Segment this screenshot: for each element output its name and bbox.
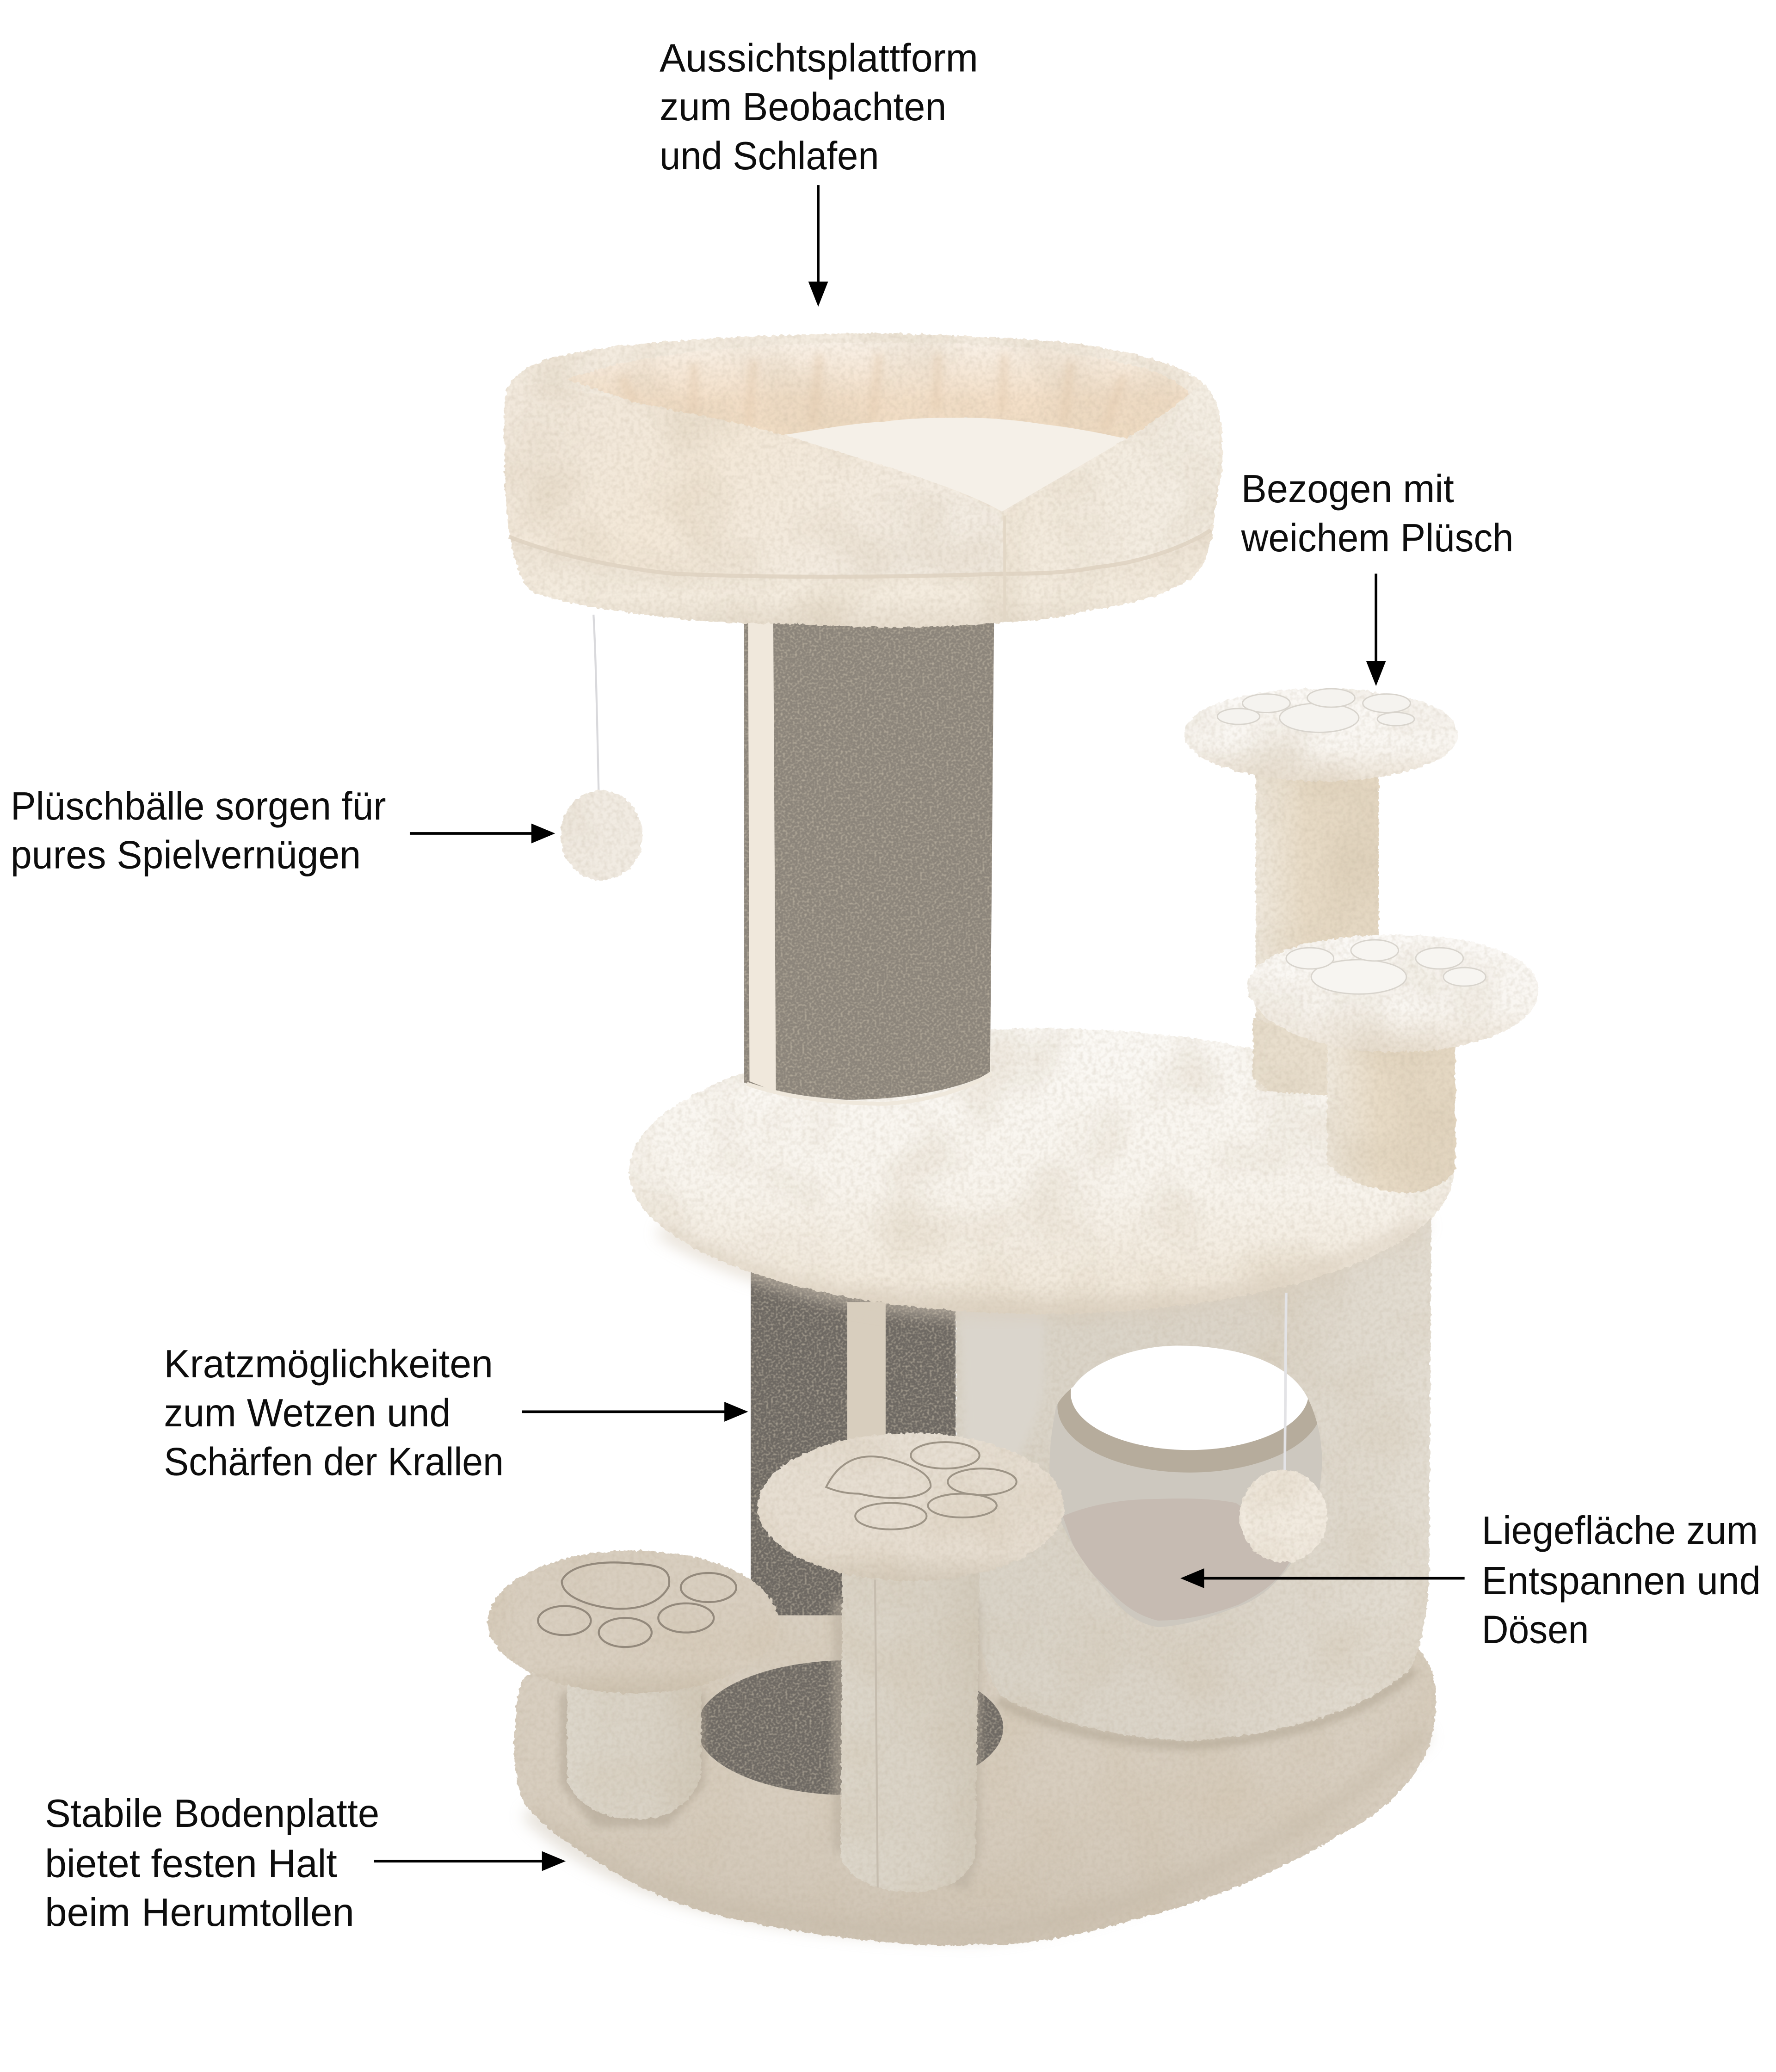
label: Liegefläche: Entspannen und (1482, 1559, 1761, 1603)
lower ball string (1285, 1293, 1286, 1470)
middle paw perch (758, 1433, 1064, 1581)
arrow: to base plate (374, 1851, 566, 1871)
scratching mat (697, 1660, 1003, 1795)
post seam (875, 1579, 878, 1887)
front-left wall (505, 384, 1005, 576)
base shading (529, 1732, 1425, 1932)
label: Aussichtsplattform: und Schlafen (660, 134, 879, 178)
cylinder lighter inner area (958, 1302, 1044, 1487)
label: Plüschbälle: pures Spielvernügen (11, 833, 361, 877)
top right plush perch (1184, 689, 1458, 781)
front right post (1327, 1038, 1455, 1193)
label: Kratzmöglichkeiten: Schärfen der Krallen (164, 1440, 504, 1484)
top bed (505, 333, 1223, 627)
paw print outlines (826, 1442, 1017, 1529)
upper plush ball (561, 790, 642, 880)
label: Stabile Bodenplatte: bietet festen Halt (45, 1841, 337, 1886)
column foot trim (747, 1073, 991, 1104)
bed lower band (509, 516, 1214, 627)
middle post (841, 1566, 980, 1892)
paw print pads (1286, 940, 1486, 994)
inner wall pleats (621, 354, 1123, 430)
band crease (509, 530, 1211, 577)
left post (567, 1676, 702, 1819)
house cylinder (956, 1196, 1431, 1741)
upper ball string (593, 615, 599, 797)
paw print outlines (538, 1562, 736, 1647)
label: Bezogen mit weichem Plüsch: Bezogen mit (1241, 467, 1454, 511)
bed cushion (784, 418, 1126, 512)
label: Aussichtsplattform: zum Beobachten (660, 85, 946, 129)
label: Aussichtsplattform (660, 36, 978, 178)
label: Stabile Bodenplatte: Stabile Bodenplatte (45, 1791, 379, 1836)
label: Liegefläche: Liegefläche zum (1482, 1508, 1758, 1553)
lower right plush perch (1248, 935, 1539, 1052)
label: Liegefläche (1482, 1508, 1761, 1652)
label: Stabile Bodenplatte (45, 1791, 379, 1935)
arrow: to plush perch (1366, 574, 1386, 686)
left paw perch (488, 1550, 778, 1693)
tunnel rim (1057, 1340, 1322, 1473)
arrow: to scratching column (522, 1402, 748, 1422)
bed seam (1004, 516, 1005, 621)
arrow: to top platform (808, 185, 828, 307)
label: Bezogen mit weichem Plüsch (1241, 467, 1513, 560)
lower scratching column (751, 1269, 956, 1616)
label: Liegefläche: Dösen (1482, 1608, 1589, 1652)
lying pad (1063, 1498, 1293, 1621)
plush strip on lower column (847, 1302, 886, 1461)
label: Plüschbälle: Plüschbälle sorgen für (11, 784, 386, 828)
label: Kratzmöglichkeiten (164, 1342, 504, 1484)
label: Bezogen mit weichem Plüsch: weichem Plüsch (1241, 516, 1513, 560)
house foot shadow (998, 1670, 1414, 1745)
upper scratching column (744, 621, 994, 1104)
front-right wall (1002, 383, 1219, 574)
paw print pads (1217, 689, 1414, 732)
label: Plüschbälle (11, 784, 386, 877)
label: Kratzmöglichkeiten: zum Wetzen und (164, 1391, 451, 1435)
house opening (1049, 1346, 1322, 1627)
upper middle platform (629, 1029, 1454, 1314)
rear right post (1256, 767, 1379, 1091)
inner wall (567, 342, 1192, 439)
middle post shadow (833, 1599, 981, 1890)
bed body (505, 333, 1223, 574)
label: Kratzmöglichkeiten: Kratzmöglichkeiten (164, 1342, 493, 1386)
window through tunnel (1071, 1336, 1308, 1450)
base plate (514, 1599, 1436, 1946)
shadow under platform (661, 1223, 1425, 1311)
arrow: to plush ball (410, 824, 555, 843)
label: Stabile Bodenplatte: beim Herumtollen (45, 1890, 354, 1935)
left post shadow (561, 1692, 704, 1827)
label: Aussichtsplattform: Aussichtsplattform (660, 36, 978, 80)
arrow: to lying pad (1180, 1568, 1465, 1588)
cat tree product illustration (488, 333, 1539, 1946)
left sub-post (1253, 1018, 1327, 1094)
plush strip on upper column (748, 621, 776, 1092)
lower plush ball (1240, 1470, 1327, 1562)
